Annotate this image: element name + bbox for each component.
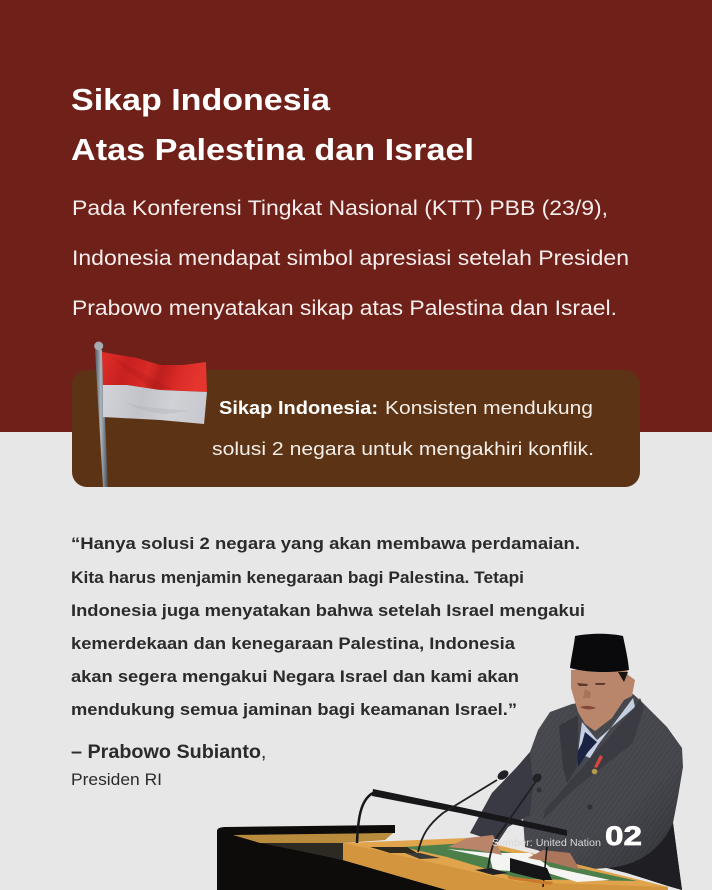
eyes [577, 683, 606, 686]
source note: Sumber: United Nation [492, 837, 601, 849]
neck and face [571, 668, 635, 731]
panel text: Sikap Indonesia: [219, 398, 378, 418]
hair [618, 672, 628, 682]
pinstripe [470, 694, 683, 890]
left hand [448, 835, 502, 855]
suit body [470, 694, 683, 890]
quote text: akan segera mengakui Negara Israel dan kami akan [71, 668, 519, 686]
quote text [71, 535, 585, 719]
orange stick [507, 876, 553, 885]
intro paragraph [72, 197, 629, 320]
podium wood [343, 838, 668, 890]
right lapel [543, 698, 644, 820]
quote attribution [71, 742, 266, 789]
dark pad [370, 847, 417, 853]
podium gold strip [233, 833, 393, 843]
intro paragraph: Pada Konferensi Tingkat Nasional (KTT) PBB (23/9), [72, 197, 608, 220]
page number: 02 [605, 821, 642, 851]
icon: Indonesian flag [94, 342, 207, 487]
background: light lower band [0, 432, 712, 890]
panel text: solusi 2 negara untuk mengakhiri konflik. [212, 439, 594, 459]
papers [447, 849, 610, 882]
left lapel [559, 715, 578, 783]
quote text: kemerdekaan dan kenegaraan Palestina, Indonesia [71, 635, 516, 653]
quote attribution: – Prabowo Subianto [71, 742, 261, 763]
title: Sikap Indonesia [71, 83, 331, 117]
quote text: “Hanya solusi 2 negara yang akan membawa perdamaian. [71, 535, 580, 553]
medal pin [594, 755, 603, 768]
quote text: mendukung semua jaminan bagi keamanan Israel.” [71, 701, 517, 719]
peci cap [570, 634, 629, 672]
dark speaker box [510, 858, 552, 880]
podium velvet [217, 825, 447, 890]
panel text [212, 398, 594, 459]
background: red upper band [0, 0, 712, 432]
intro paragraph: Prabowo menyatakan sikap atas Palestina dan Israel. [72, 297, 617, 320]
left sleeve shade [470, 752, 533, 842]
thin microphones [418, 780, 497, 852]
intro paragraph: Indonesia mendapat simbol apresiasi setelah Presiden [72, 247, 629, 270]
tie [577, 732, 597, 767]
quote text: Indonesia juga menyatakan bahwa setelah Israel mengakui [71, 602, 585, 620]
quote attribution: , [261, 742, 266, 763]
shirt collar [578, 698, 635, 758]
right hand [528, 850, 580, 870]
photo: Prabowo speaking at the podium [217, 634, 683, 890]
title [71, 83, 474, 167]
lower shadow [607, 823, 682, 890]
quote attribution: Presiden RI [71, 771, 162, 789]
microphone arm [372, 789, 567, 836]
mouth [580, 706, 596, 709]
nose [583, 689, 591, 698]
title: Atas Palestina dan Israel [71, 133, 474, 167]
buttons [536, 788, 542, 792]
panel: Indonesia's stance [72, 370, 640, 487]
podium inner shadow [260, 843, 343, 860]
panel text: Konsisten mendukung [385, 398, 593, 418]
green desk mat [403, 843, 637, 881]
quote text: Kita harus menjamin kenegaraan bagi Palestina. Tetapi [71, 569, 524, 587]
